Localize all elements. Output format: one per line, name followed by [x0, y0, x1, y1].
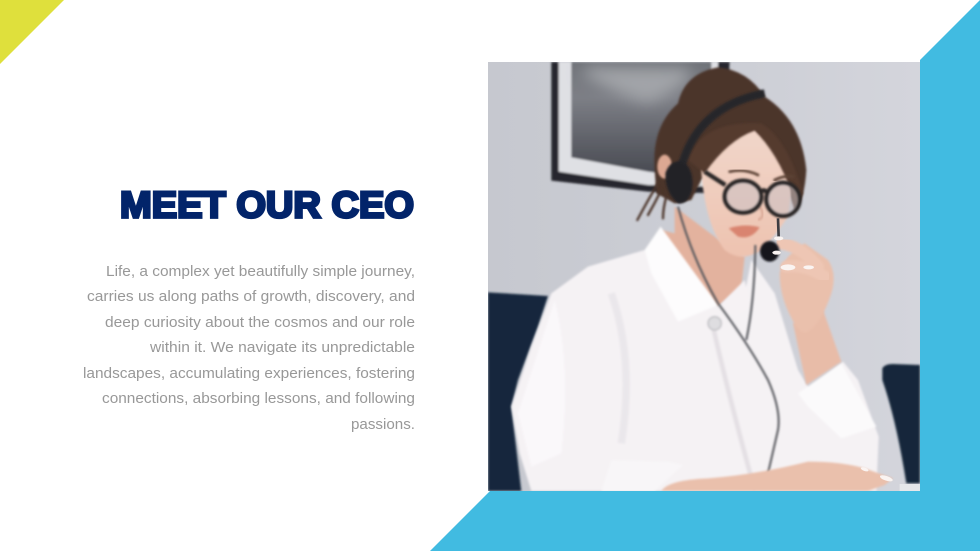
yellow corner triangle	[0, 0, 64, 64]
body paragraph	[83, 263, 415, 433]
forearm	[793, 310, 841, 385]
desk	[900, 484, 920, 491]
heading: MEET OUR CEO	[120, 184, 414, 226]
eyebrows	[730, 171, 793, 180]
neck	[661, 207, 745, 307]
loose hair wisps	[637, 183, 666, 220]
mic boom	[776, 218, 780, 236]
hair bun and back	[654, 67, 806, 210]
photo: CEO wearing a headset at her desk	[488, 60, 920, 492]
fingernails	[772, 236, 814, 270]
body paragraph: carries us along paths of growth, discovery, and	[87, 288, 415, 305]
body paragraph: passions.	[351, 416, 415, 433]
glasses	[705, 172, 800, 216]
blue backdrop shape	[430, 0, 980, 551]
lips	[729, 226, 760, 237]
left chair	[488, 292, 548, 491]
body paragraph: within it. We navigate its unpredictable	[149, 339, 415, 356]
fingers	[776, 240, 802, 269]
framed picture	[551, 62, 730, 193]
microphone	[760, 241, 779, 262]
hand at microphone	[780, 243, 834, 333]
typing fingernails	[861, 467, 893, 482]
fringe of hair	[690, 124, 804, 198]
body paragraph: connections, absorbing lessons, and following	[102, 390, 415, 407]
typing hand	[661, 462, 893, 491]
shirt	[511, 227, 879, 491]
shirt cuff	[602, 490, 655, 491]
body paragraph: Life, a complex yet beautifully simple journey,	[106, 263, 415, 280]
ear	[657, 155, 672, 179]
body paragraph: landscapes, accumulating experiences, fostering	[83, 365, 415, 382]
earpiece	[665, 161, 692, 203]
body paragraph: deep curiosity about the cosmos and our role	[105, 314, 415, 331]
headset cables	[678, 207, 779, 473]
office wall	[488, 60, 920, 492]
right chair	[882, 364, 920, 483]
nose shadow	[758, 207, 763, 220]
headset band	[680, 93, 765, 173]
face	[701, 128, 793, 257]
